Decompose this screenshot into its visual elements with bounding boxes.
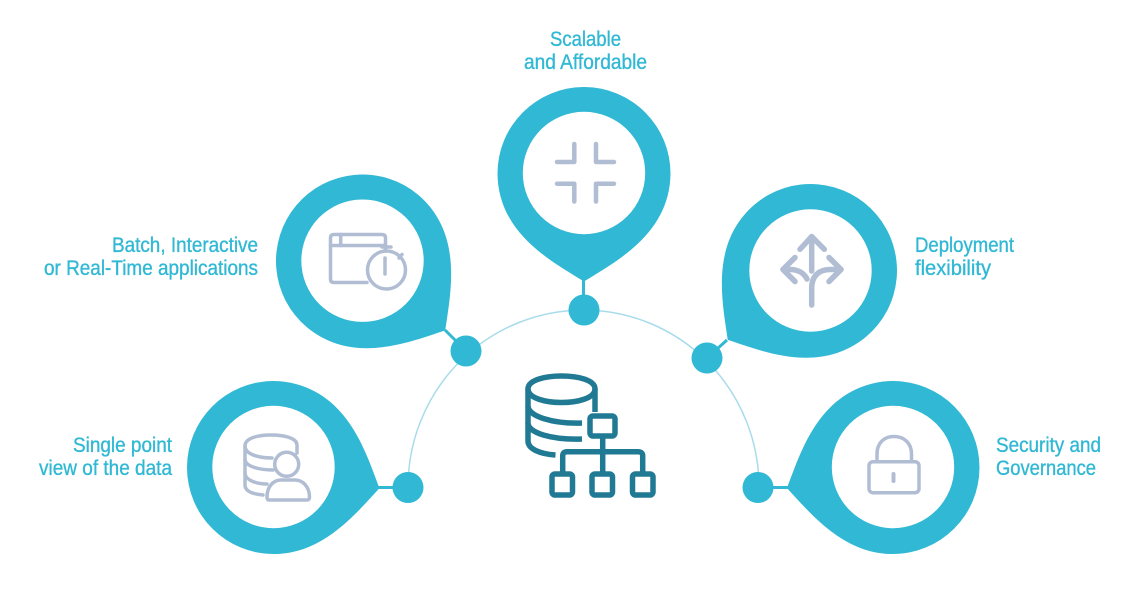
label: deployment flexibility: flexibility xyxy=(915,257,991,280)
pin: batch, interactive or real-time applications xyxy=(241,139,501,397)
pin: single point view of the data xyxy=(172,366,424,573)
label: scalable and affordable xyxy=(524,28,647,74)
pin: security and governance xyxy=(742,366,994,573)
pin: scalable and affordable xyxy=(498,87,670,326)
label: security and governance: Governance xyxy=(996,457,1096,480)
icon: database with user xyxy=(245,435,310,500)
label: single point view of the data: view of the data xyxy=(39,457,172,480)
icon: compress arrows xyxy=(557,144,614,202)
label: security and governance: Security and xyxy=(996,434,1101,457)
label: scalable and affordable: and Affordable xyxy=(524,51,647,74)
icon: window with stopwatch xyxy=(330,234,406,289)
icon: padlock xyxy=(869,436,919,493)
label: batch, interactive or real-time applications: or Real-Time applications xyxy=(44,257,258,280)
label: scalable and affordable: Scalable xyxy=(550,28,621,51)
pin: deployment flexibility xyxy=(672,149,932,406)
label: single point view of the data xyxy=(39,434,172,480)
label: batch, interactive or real-time applications xyxy=(44,234,258,280)
central icon: database hierarchy xyxy=(528,376,653,495)
label: deployment flexibility xyxy=(915,234,1014,280)
icon: three-way arrows xyxy=(783,236,841,305)
connecting arc xyxy=(408,310,759,487)
label: single point view of the data: Single point xyxy=(73,434,172,457)
label: security and governance xyxy=(996,434,1101,480)
label: deployment flexibility: Deployment xyxy=(915,234,1014,257)
label: batch, interactive or real-time applications: Batch, Interactive xyxy=(112,234,258,257)
